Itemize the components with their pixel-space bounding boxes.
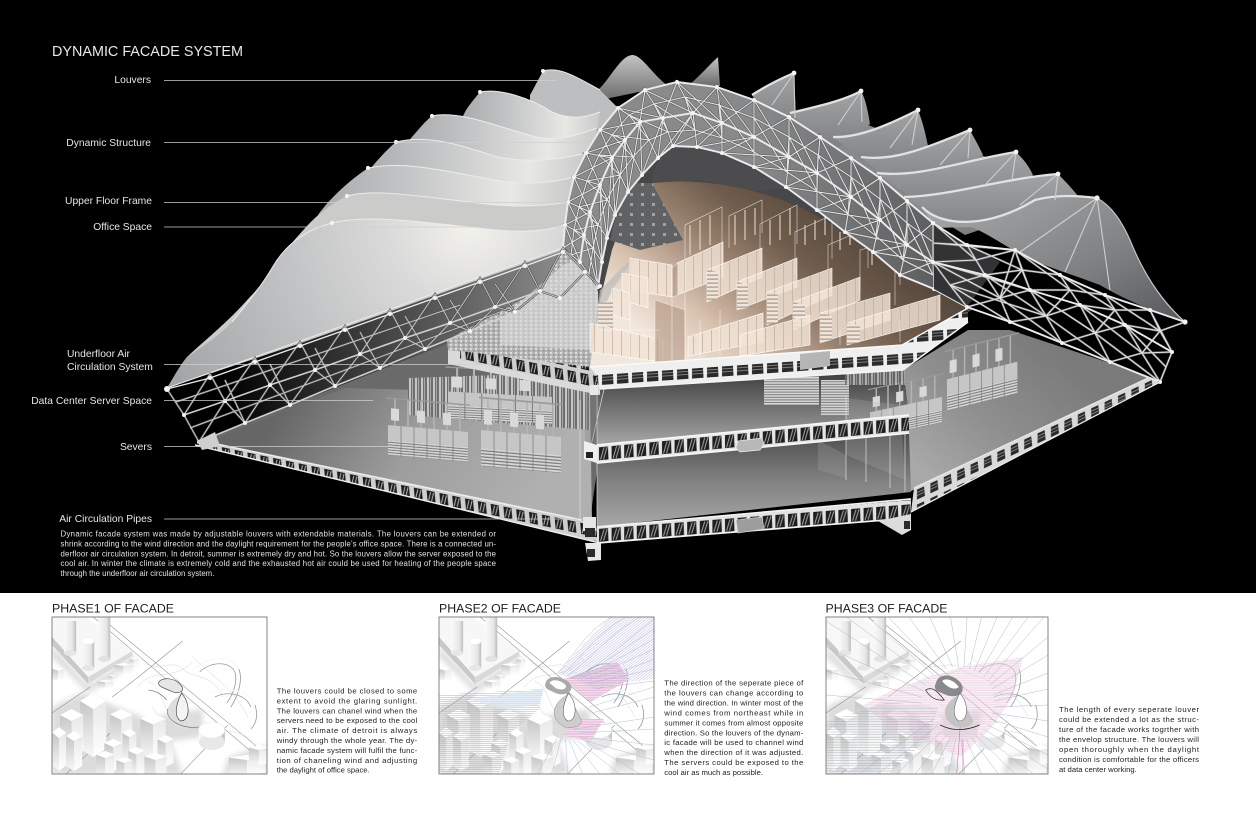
title: DYNAMIC FACADE SYSTEM	[52, 44, 243, 60]
left truss	[164, 248, 600, 442]
lower floor	[597, 433, 911, 527]
white lower panel background	[0, 593, 1256, 813]
phase 1 text: windy through the whole year. The dy-	[276, 736, 418, 745]
phase 3 text: The length of every seperate louver	[1059, 705, 1199, 714]
phase 1 text	[276, 686, 418, 775]
label: Data Center Server Space: Data Center Server Space	[31, 396, 152, 407]
middle floor slab	[584, 415, 909, 463]
phase 2 text: summer it comes from almost opposite	[664, 718, 803, 727]
phase 2 text: The direction of the seperate piece of	[664, 678, 804, 688]
right side louvers	[752, 71, 1188, 325]
left side louvers	[167, 69, 620, 388]
description paragraph	[60, 530, 496, 578]
phase 1 text: air. The climate of detroit is always	[277, 726, 417, 735]
phase 3 text: could be extended a lot as the struc-	[1059, 715, 1199, 724]
phase 2 text: the louvers can change according to	[664, 688, 803, 698]
phase 2 text: The servers could be exposed to the	[664, 758, 803, 767]
interior backing behind the arch	[590, 145, 972, 370]
middle floor	[597, 370, 909, 445]
phase 2 city diagram with wind lines	[439, 617, 656, 781]
office floor	[590, 181, 968, 367]
phase 1 text: extent to avoid the glaring sunlight.	[277, 696, 417, 705]
upper floor slab with air circulation vents	[448, 308, 968, 395]
phase 3 text: condition is comfortable for the officers	[1059, 755, 1199, 764]
left truss backing	[225, 250, 600, 423]
phase 2 text: wind comes from northeast while in	[663, 708, 803, 717]
phase 1 text: servers need to be exposed to the cool	[277, 716, 417, 725]
label: Air Circulation Pipes: Air Circulation Pipes	[59, 514, 152, 525]
left server racks	[386, 367, 563, 473]
arch truss	[563, 82, 968, 307]
right floor edge band	[911, 378, 1160, 512]
label: Louvers: Louvers	[114, 75, 151, 86]
black upper panel background	[0, 0, 1256, 593]
phase 2 text: direction. So the louvers of the dynam-	[664, 728, 804, 737]
label: Upper Floor Frame: Upper Floor Frame	[65, 196, 152, 207]
phase 1 text: the daylight of office space.	[277, 766, 370, 775]
label: Underfloor Air Circulation System: Circulation System	[67, 362, 153, 373]
right truss	[933, 223, 1185, 382]
phase 1 city diagram	[52, 617, 269, 781]
right data-center floor	[903, 330, 1148, 492]
phase 1 text: namic facade system will fulfil the func-	[277, 746, 418, 755]
right server racks	[764, 333, 1019, 438]
phase 3 text	[1059, 705, 1200, 774]
interior back wall behind left truss	[199, 290, 600, 520]
phase 3 text: at data center working.	[1059, 765, 1137, 774]
description paragraph: shrink according to the wind direction and the daylight requirement for the people’s office space. There is a connected un-	[60, 540, 496, 548]
label: Office Space: Office Space	[93, 222, 152, 233]
label: Dynamic Structure: Dynamic Structure	[66, 138, 151, 149]
description paragraph: through the underfloor air circulation system.	[60, 569, 214, 578]
left data-center floor	[207, 388, 592, 522]
phase 2 text: cool air as much as possible.	[664, 768, 763, 777]
phase 2 text	[663, 678, 804, 777]
support feet	[583, 514, 911, 561]
office server racks	[590, 200, 940, 362]
phase 3 city diagram with wind lines	[826, 617, 1050, 781]
phase 2 text: the wind direction. In winter most of the	[664, 698, 803, 707]
phase 1 text: The louvers can chanel wind when the	[277, 706, 417, 715]
phase 3 text: open thoroughly when the daylight	[1059, 745, 1200, 754]
label: Underfloor Air Circulation System	[67, 349, 482, 373]
label: Underfloor Air Circulation System: Underfloor Air	[67, 349, 131, 360]
description paragraph: derfloor air circulation system. In detroit, summer is extremely dry and hot. So the louvers allow the server exposed to the	[60, 549, 496, 558]
label: Severs: Severs	[120, 442, 152, 453]
lower floor slab	[597, 499, 911, 543]
phase 1 text: tion of chaneling wind and adjusting	[277, 756, 417, 765]
backing at arch and right truss junction	[933, 223, 1000, 307]
phase 2 text: when the direction of it was adjusted.	[663, 748, 803, 757]
glass partitions	[580, 385, 905, 528]
phase 2 text: ic facade will be used to channel wind	[664, 738, 803, 747]
phase 1 text: The louvers could be closed to some	[277, 686, 417, 696]
phase 1 heading: PHASE1 OF FACADE	[52, 602, 174, 616]
phase 3 text: the envelop structure. The louvers will	[1059, 735, 1199, 744]
phase 2 heading: PHASE2 OF FACADE	[439, 602, 561, 616]
building section illustration	[164, 55, 1188, 561]
far back louver hills	[596, 55, 720, 100]
left floor edge band	[195, 432, 600, 543]
phase 3 heading: PHASE3 OF FACADE	[826, 602, 948, 616]
description paragraph: cool air. In winter the climate is extremely cold and the exhausted hot air could be used for heating of the people space	[60, 559, 496, 568]
description paragraph: Dynamic facade system was made by adjustable louvers with extendable materials. The louvers can be extended or	[60, 530, 496, 538]
translucent server space behind the facade	[408, 225, 600, 430]
phase 3 text: ture of the facade works togrther with	[1059, 725, 1199, 734]
